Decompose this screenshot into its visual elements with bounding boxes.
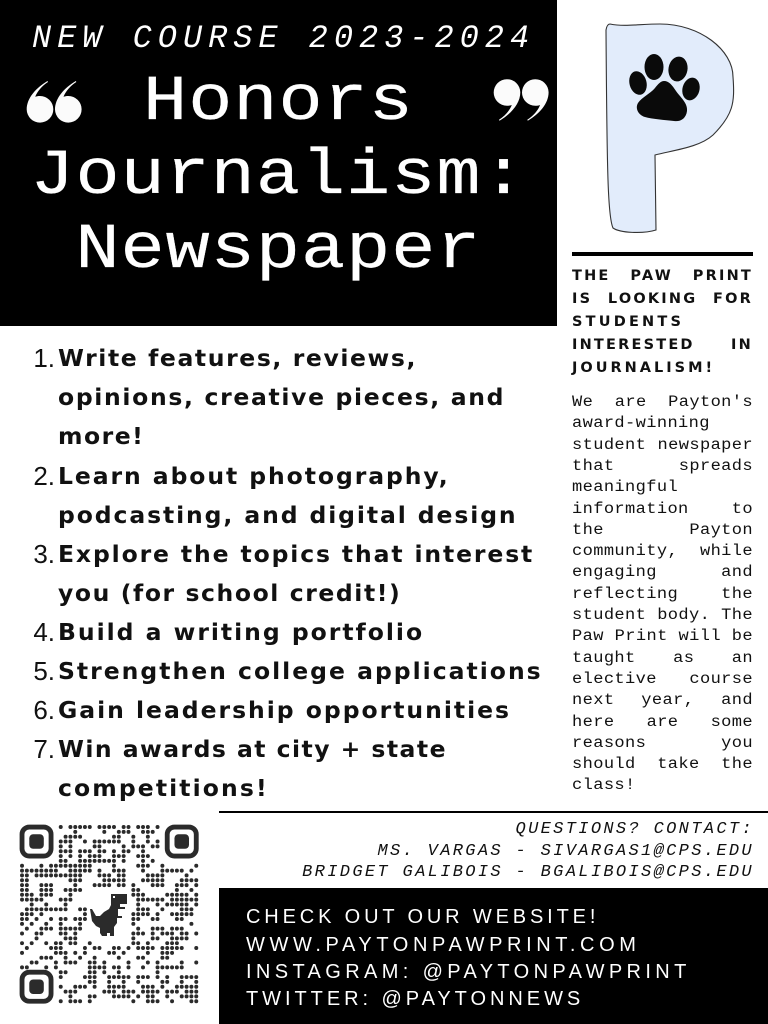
panel: title header <box>0 0 557 326</box>
text: INTERESTED IN <box>572 336 753 352</box>
sidebar body text: student body. The <box>572 606 753 624</box>
numbered list of course benefits: Learn about photography, <box>58 462 450 490</box>
contact heading: QUESTIONS? CONTACT: <box>516 820 754 838</box>
title line: Honors: Honors <box>143 66 414 138</box>
teacher contact: MS. VARGAS - SIVARGAS1@CPS.EDU <box>377 842 754 860</box>
sidebar body text <box>572 393 753 794</box>
numbered list of course benefits: 4. <box>33 617 55 647</box>
numbered list of course benefits: Win awards at city + state <box>58 735 447 763</box>
text: THE PAW PRINT <box>572 268 753 284</box>
website url: WWW.PAYTONPAWPRINT.COM <box>246 934 641 956</box>
numbered list of course benefits: 2. <box>33 461 55 491</box>
sidebar body text: the Payton <box>572 521 753 539</box>
text: IS LOOKING FOR <box>572 290 753 306</box>
numbered list of course benefits: Gain leadership opportunities <box>58 696 511 724</box>
numbered list of course benefits: 3. <box>33 539 55 569</box>
title line: Newspaper: Newspaper <box>75 215 482 287</box>
numbered list of course benefits: opinions, creative pieces, and <box>58 383 505 411</box>
numbered list of course benefits: competitions! <box>58 774 269 802</box>
numbered list of course benefits: more! <box>58 422 144 450</box>
numbered list of course benefits: Write features, reviews, <box>58 344 417 372</box>
numbered list of course benefits: Strengthen college applications <box>58 657 543 685</box>
sidebar body text: community, while <box>572 542 753 560</box>
numbered list of course benefits: 7. <box>33 734 55 764</box>
sidebar heading <box>571 268 753 376</box>
sidebar body text: award-winning <box>572 414 710 432</box>
sidebar body text: that spreads <box>572 457 753 475</box>
icon: QR code with dinosaur <box>20 824 199 1004</box>
icon: closing quote mark <box>494 79 549 121</box>
website call to action: CHECK OUT OUR WEBSITE! <box>246 906 599 928</box>
icon: opening quote mark <box>26 81 82 123</box>
sidebar body text: student newspaper <box>572 436 753 454</box>
sidebar body text: engaging and <box>572 563 753 581</box>
title line: Journalism: Journalism: <box>30 140 527 212</box>
student contact: BRIDGET GALIBOIS - BGALIBOIS@CPS.EDU <box>302 863 754 882</box>
sidebar body text: taught as an <box>572 649 753 667</box>
sidebar body text: reflecting the <box>572 585 753 603</box>
sidebar body text: should take the <box>572 755 753 773</box>
numbered list of course benefits: you (for school credit!) <box>58 579 401 607</box>
panel: about sidebar <box>572 252 753 256</box>
instagram handle: INSTAGRAM: @PAYTONPAWPRINT <box>246 960 691 982</box>
sidebar body text: class! <box>572 776 636 794</box>
text: JOURNALISM! <box>572 360 715 376</box>
numbered list of course benefits: podcasting, and digital design <box>58 501 518 529</box>
panel: website and social links <box>219 888 768 1024</box>
numbered list of course benefits: Explore the topics that interest <box>58 540 534 568</box>
sidebar body text: Paw Print will be <box>572 627 753 645</box>
course year label: NEW COURSE 2023-2024 <box>32 20 535 57</box>
panel: contact details <box>219 811 768 883</box>
sidebar body text: information to <box>572 500 753 518</box>
sidebar body text: reasons you <box>572 734 753 752</box>
twitter handle: TWITTER: @PAYTONNEWS <box>246 988 584 1010</box>
numbered list of course benefits: 5. <box>33 656 55 686</box>
sidebar body text: here are some <box>572 712 753 730</box>
numbered list of course benefits: 1. <box>33 343 55 373</box>
sidebar body text: meaningful <box>572 478 678 496</box>
numbered list of course benefits: Build a writing portfolio <box>58 618 424 646</box>
numbered list of course benefits: 6. <box>33 695 55 725</box>
sidebar body text: We are Payton's <box>572 393 753 411</box>
sidebar body text: next year, and <box>572 691 753 709</box>
icon: Paw Print P logo <box>605 24 734 233</box>
numbered list of course benefits <box>33 343 543 802</box>
text: STUDENTS <box>572 314 684 330</box>
sidebar body text: elective course <box>572 670 753 688</box>
sidebar top rule <box>572 252 753 256</box>
